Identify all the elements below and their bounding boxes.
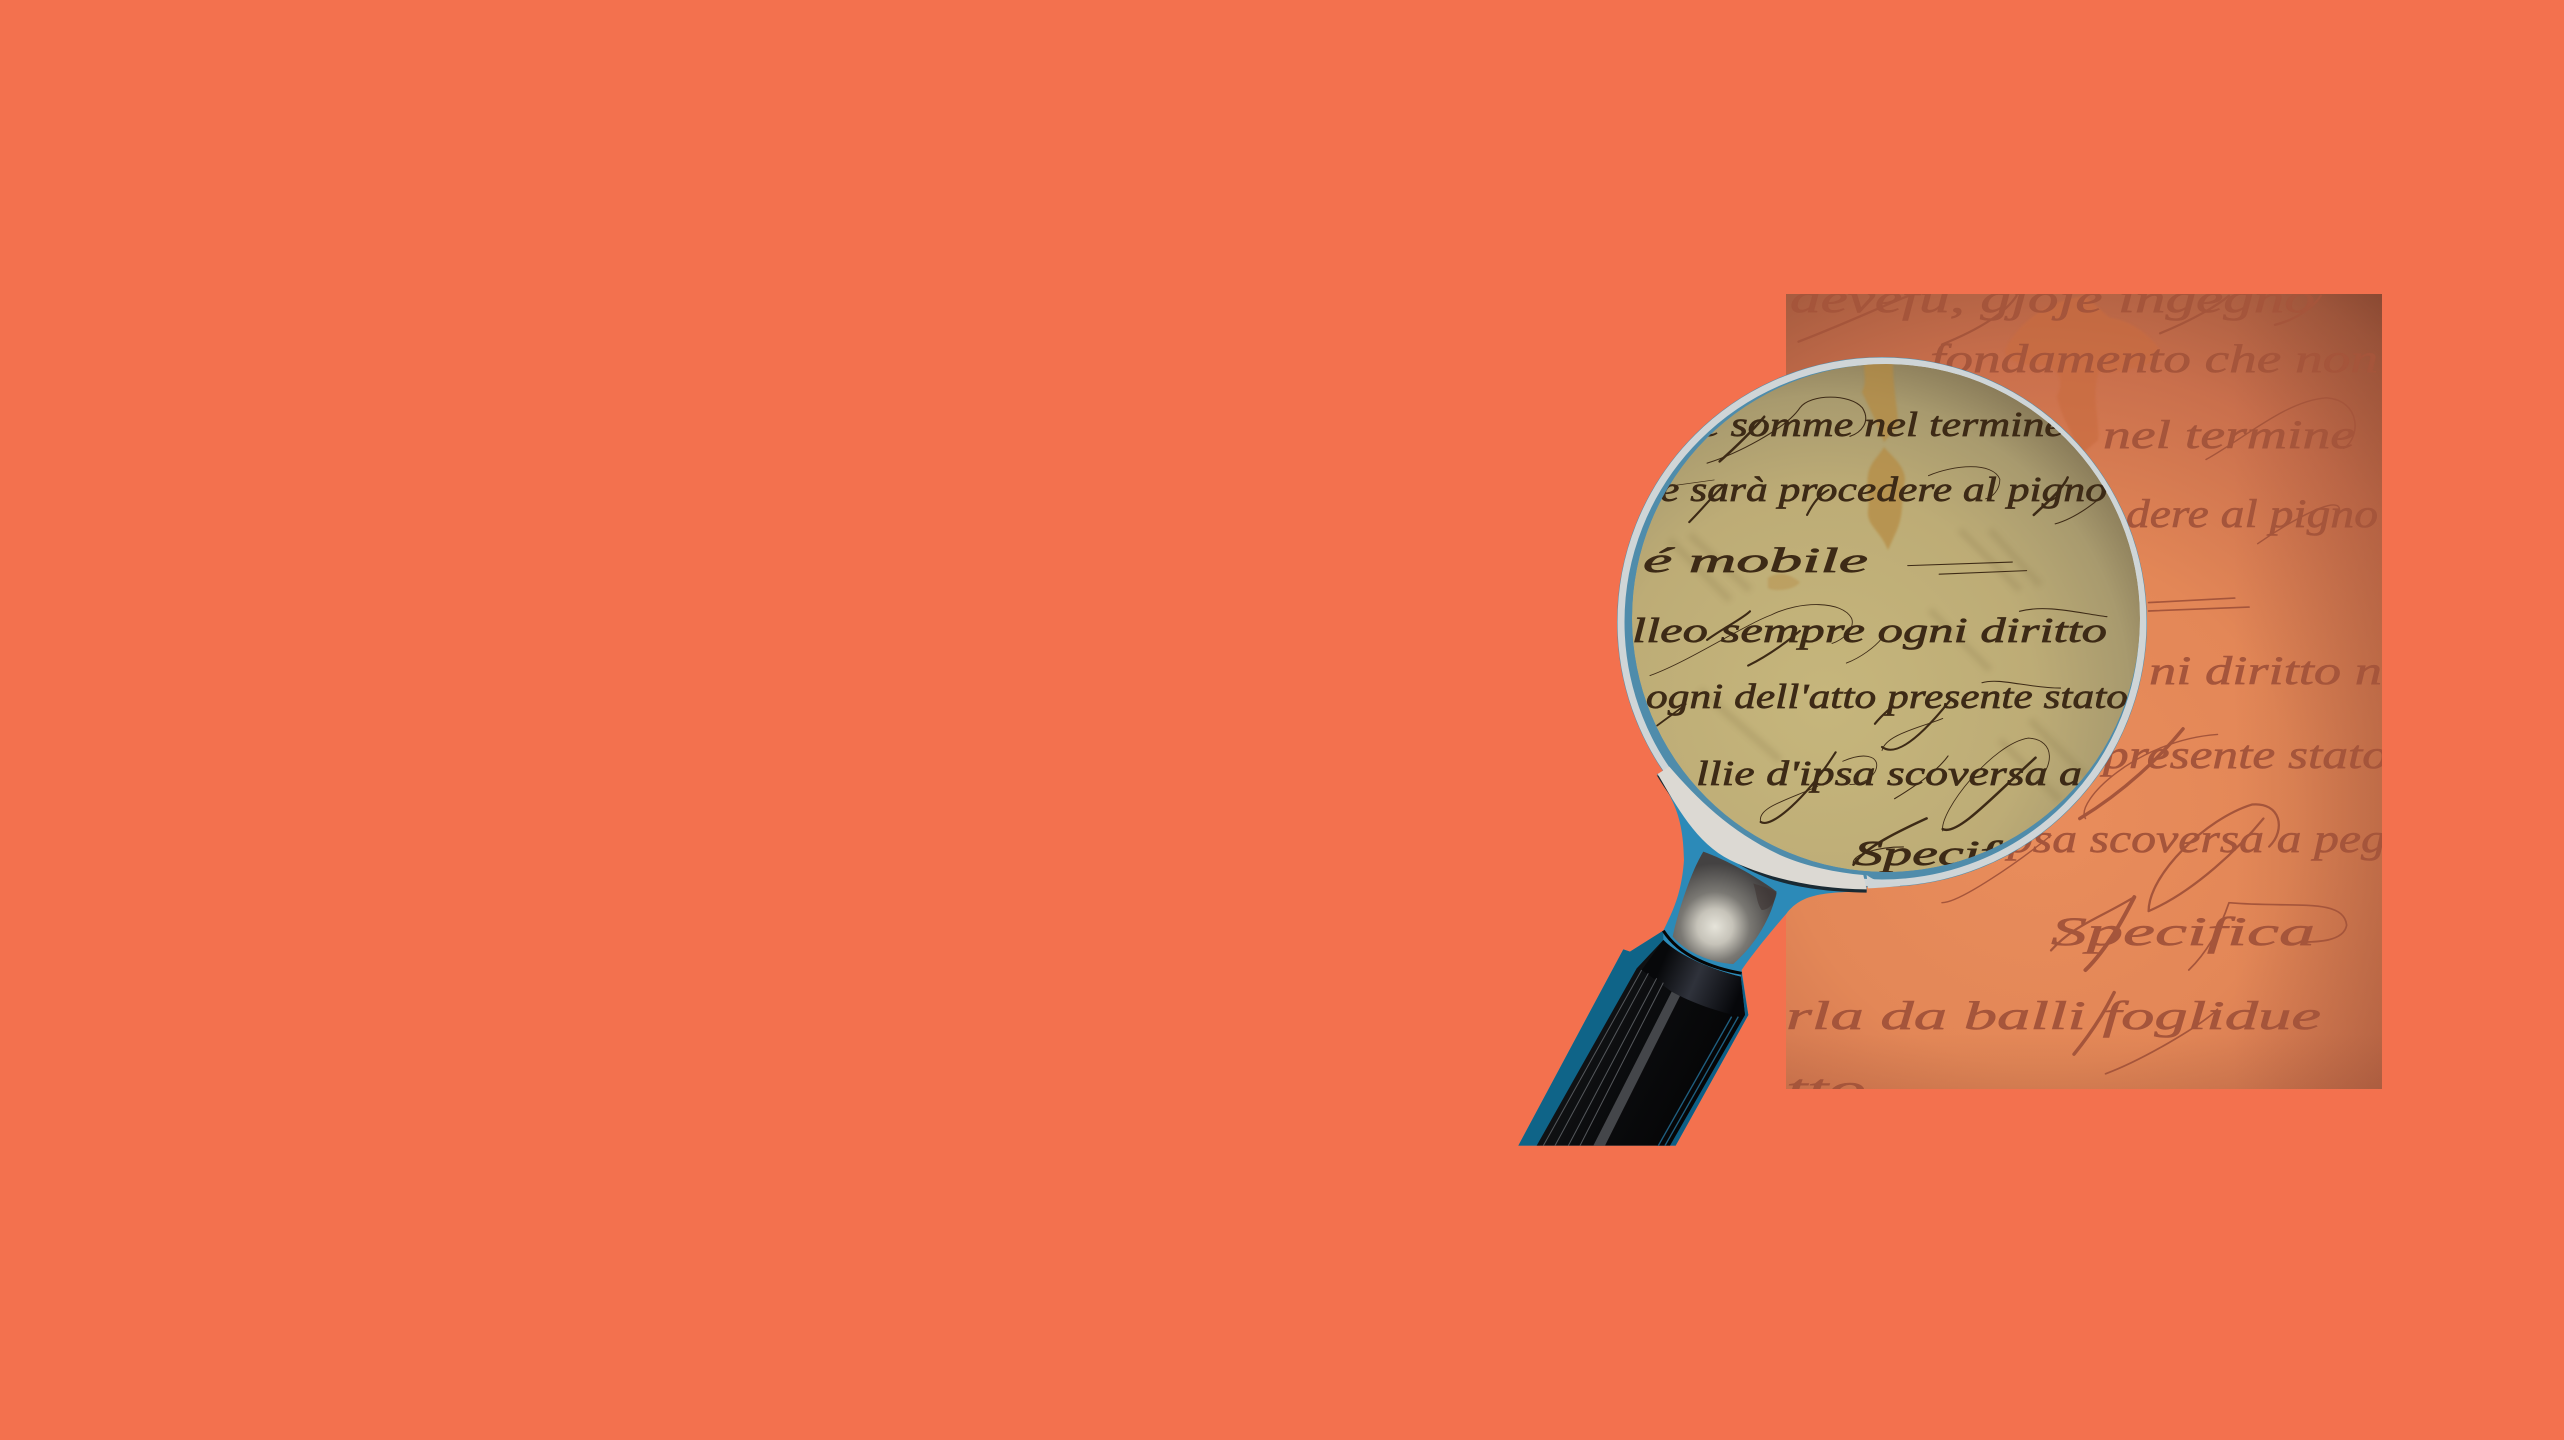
handwriting lines on document: fondamento che non — [1930, 336, 2378, 381]
handwriting lines on document: ipsa scoversa a peg — [1994, 816, 2386, 861]
handwriting lines on document: tto — [1786, 1066, 1866, 1111]
magnifying glass — [1518, 357, 2147, 1146]
lens stains — [1768, 362, 1905, 590]
lens: silver clamp crescent — [1657, 767, 1900, 893]
lens rim — [1617, 357, 2147, 887]
handwriting lines on document: presente stato — [2099, 732, 2388, 777]
lens handwriting flourishes — [1650, 397, 2107, 865]
handwriting lines on document: nel termine — [2103, 412, 2355, 457]
handwriting lines on document: devefu, gjoje ingegno — [1790, 276, 2315, 321]
lens handwriting lines: e somme nel termine — [1700, 405, 2064, 444]
lens handwriting lines: ogni dell'atto presente stato — [1646, 677, 2128, 716]
handwriting lines on document: Specifica — [2051, 909, 2315, 954]
panel: enlarged handwritten document — [1786, 276, 2388, 1111]
handle: black ribbed grip — [1537, 940, 1745, 1146]
handwriting lines on document: dere al pigno — [2126, 491, 2378, 536]
lens handwriting lines — [1632, 405, 2128, 873]
lens handwriting lines: Specif — [1854, 834, 2003, 873]
handle: blue reflective grip body — [1518, 773, 1867, 1146]
handwriting lines on document: rla da balli foglidue — [1786, 993, 2321, 1038]
lens handwriting lines: llie d'ipsa scoversa a — [1696, 754, 2082, 793]
handwriting lines on document — [1786, 276, 2388, 1111]
lens handwriting lines: e sarà procedere al pigno — [1660, 470, 2107, 509]
handwriting flourishes on document — [1798, 294, 2355, 1074]
handle: chrome neck — [1673, 852, 1777, 964]
lens handwriting lines: lleo sempre ogni diritto — [1632, 611, 2107, 650]
lens bleed-through marks — [1670, 530, 2090, 800]
lens handwriting lines: é mobile — [1643, 541, 1868, 580]
lens: magnified document — [1632, 362, 2140, 873]
handwriting lines on document: ni diritto n — [2149, 648, 2382, 693]
